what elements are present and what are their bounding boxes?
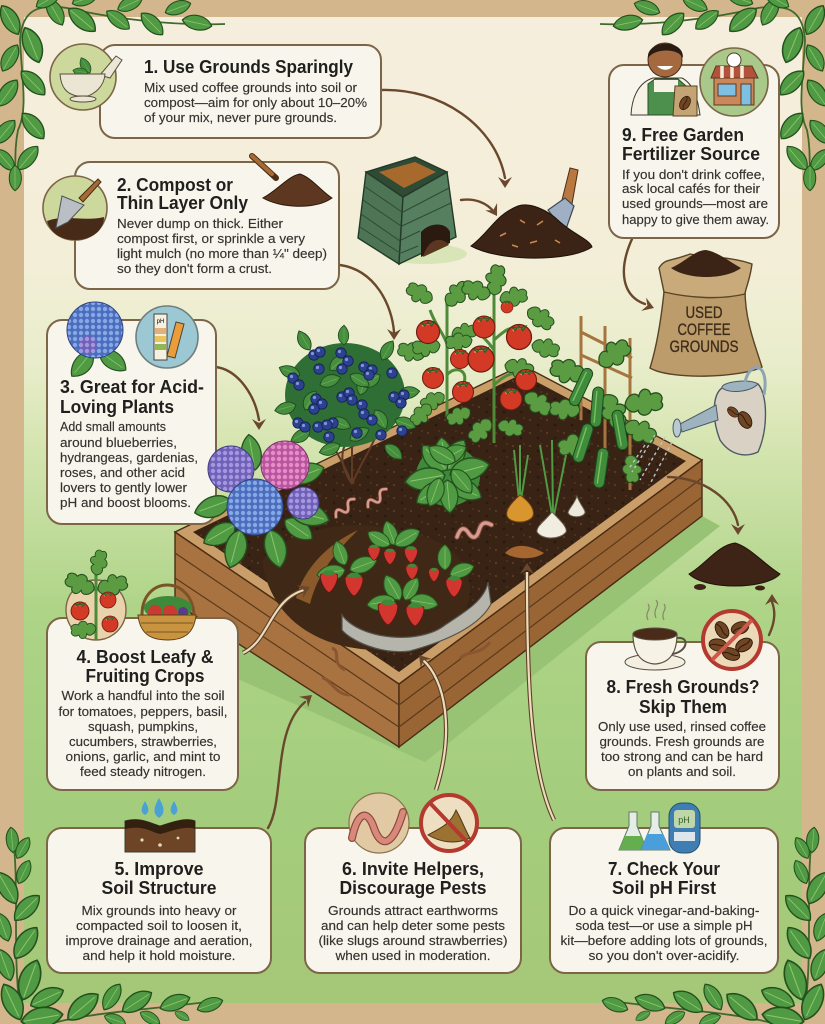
icon: soil block with drops [125, 798, 195, 852]
heading: 5. Improve [114, 858, 204, 879]
body text: compost first, or sprinkle a very [117, 231, 306, 246]
body text: Grounds attract earthworms [328, 903, 499, 918]
body text: soda test—or use a simple pH [576, 918, 752, 933]
heading: Discourage Pests [340, 877, 486, 898]
body text [598, 719, 766, 779]
heading: Skip Them [639, 696, 727, 717]
tomato plants [396, 264, 561, 447]
body text [144, 80, 367, 125]
icon: cafe storefront [700, 48, 768, 116]
heading: 2. Compost or [117, 174, 233, 195]
arrow: 2 to bed [340, 265, 401, 340]
bed faces [175, 365, 702, 747]
worms on bed side [322, 642, 490, 695]
shadow beneath bed [150, 516, 720, 762]
panel: 3 acid-loving plants [47, 302, 216, 524]
body text: Only use used, rinsed coffee [598, 719, 766, 734]
body text: used grounds—most are [622, 196, 768, 211]
icon: flasks and pH meter [619, 803, 700, 853]
icon: pH test strips: pH [157, 319, 164, 325]
panel: 5 soil structure [47, 798, 271, 973]
heading: Fruiting Crops [86, 665, 204, 686]
heading [102, 858, 216, 898]
panel: 1 use grounds sparingly [50, 44, 381, 138]
soil [193, 374, 686, 672]
bag label: COFFEE [678, 320, 730, 339]
arrow: 8 to pile [765, 594, 779, 635]
body text: lovers to gently lower [60, 480, 188, 495]
heading: 4. Boost Leafy & [76, 646, 214, 667]
body text: and can help deter some pests [321, 918, 506, 933]
onion and garlic [507, 440, 585, 538]
panel: 6 helpers and pests [305, 793, 521, 973]
icon: trowel in soil [43, 176, 107, 240]
icon: no slugs [421, 795, 477, 851]
arrow: 7 to soil [520, 563, 554, 820]
body text: Add small amounts [60, 419, 166, 434]
panel: 7 check soil pH [550, 803, 778, 973]
small pile of fresh grounds [689, 543, 780, 590]
body text [60, 419, 198, 510]
icon: earthworm [349, 793, 409, 853]
body text: compost—aim for only about 10–20% [144, 95, 367, 110]
icon: barista with bag [631, 43, 700, 116]
arrow: 9 to bag [624, 239, 656, 315]
body text [560, 903, 768, 963]
body text: ask local cafés for their [622, 181, 761, 196]
heading: 9. Free Garden [622, 124, 744, 145]
watering can [673, 367, 766, 455]
cucumber trellis [548, 316, 665, 490]
body text: squash, pumpkins, [88, 719, 198, 734]
body text: roses, and other acid [60, 465, 185, 480]
body text: for tomatoes, peppers, basil, [58, 704, 228, 719]
coffee compost pile with scoop [471, 168, 592, 258]
watering spray [628, 435, 672, 484]
bag label: GROUNDS [670, 337, 738, 356]
heading [340, 858, 486, 898]
heading: Soil Structure [102, 877, 216, 898]
basil [403, 435, 492, 514]
burlap bag of used coffee grounds [650, 250, 762, 376]
icon: mortar and pestle [50, 44, 122, 110]
panel: 8 fresh grounds skip [586, 600, 779, 790]
arrow: 3 to hydrangea [216, 367, 266, 430]
heading [608, 858, 720, 898]
hydrangeas [192, 433, 332, 571]
body text: when used in moderation. [334, 948, 490, 963]
heading [117, 174, 249, 213]
arrow: 4 to soil [243, 581, 313, 653]
body text [66, 903, 252, 963]
heading: 1. Use Grounds Sparingly [144, 56, 354, 77]
body text [58, 688, 228, 779]
icon: hydrangea bloom [66, 302, 131, 382]
body text: cucumbers, strawberries, [69, 734, 217, 749]
blueberry bush [273, 325, 421, 484]
body text: Mix used coffee grounds into soil or [144, 80, 358, 95]
icon: trowel and soil heap [252, 156, 332, 206]
body text: happy to give them away. [622, 212, 769, 227]
body text: too strong and can be hard [601, 749, 763, 764]
body text: Never dump on thick. Either [117, 216, 284, 231]
icon: pH test strips [136, 306, 198, 368]
body text: so you don't over-acidify. [588, 948, 740, 963]
panel: 4 leafy and fruiting crops [47, 549, 238, 790]
body text: Do a quick vinegar-and-baking- [568, 903, 760, 918]
panel: 9 free fertilizer source [609, 43, 779, 238]
panel: 2 compost or thin layer only [43, 156, 339, 289]
heading: Loving Plants [60, 396, 174, 417]
icon: tomato plant [62, 549, 130, 640]
body text [622, 167, 769, 227]
arrow: 5 to bed [268, 690, 316, 828]
body text: onions, garlic, and mint to [66, 749, 220, 764]
arrow: bed to pile [668, 477, 745, 535]
heading: 8. Fresh Grounds? [606, 676, 760, 697]
heading [76, 646, 214, 686]
heading: Fertilizer Source [622, 143, 760, 164]
heading: Soil pH First [612, 877, 716, 898]
body text: around blueberries, [60, 435, 177, 450]
arrow: 6 to collar [414, 651, 446, 790]
arrow: bin to pile [461, 200, 503, 220]
heading: Thin Layer Only [117, 192, 249, 213]
body text: of your mix, never pure grounds. [144, 110, 337, 125]
body text: hydrangeas, gardenias, [60, 450, 198, 465]
body text: compacted soil to loosen it, [76, 918, 242, 933]
body text: Work a handful into the soil [62, 688, 225, 703]
heading [606, 676, 760, 717]
body text: so they don't form a crust. [117, 261, 272, 276]
compost bin [358, 157, 467, 264]
strawberries [316, 519, 491, 652]
body text: light mulch (no more than ¼" deep) [117, 246, 327, 261]
icon: basket of vegetables [138, 585, 196, 640]
bag label [670, 303, 738, 356]
icon: no fresh beans [703, 611, 761, 669]
heading [60, 376, 204, 417]
heading: 6. Invite Helpers, [342, 858, 484, 879]
raised garden bed [175, 264, 702, 747]
body text [318, 903, 508, 963]
body text: improve drainage and aeration, [66, 933, 252, 948]
heading: 7. Check Your [608, 858, 720, 879]
icon: flasks and pH meter: pH [678, 815, 690, 825]
arrow: 1 to pile [381, 90, 512, 188]
body text [117, 216, 327, 276]
bag label: USED [686, 303, 722, 322]
body text: pH and boost blooms. [60, 495, 191, 510]
body text: If you don't drink coffee, [622, 167, 765, 182]
heading: 3. Great for Acid- [60, 376, 204, 397]
body text: (like slugs around strawberries) [318, 933, 508, 948]
body text: on plants and soil. [628, 764, 736, 779]
body text: and help it hold moisture. [82, 948, 236, 963]
heading [622, 124, 760, 164]
body text: grounds. Fresh grounds are [600, 734, 764, 749]
body text: feed steady nitrogen. [80, 764, 206, 779]
earthworms in soil [332, 487, 493, 646]
icon: coffee cup [625, 600, 686, 670]
body text: kit—before adding lots of grounds, [560, 933, 768, 948]
body text: Mix grounds into heavy or [82, 903, 237, 918]
